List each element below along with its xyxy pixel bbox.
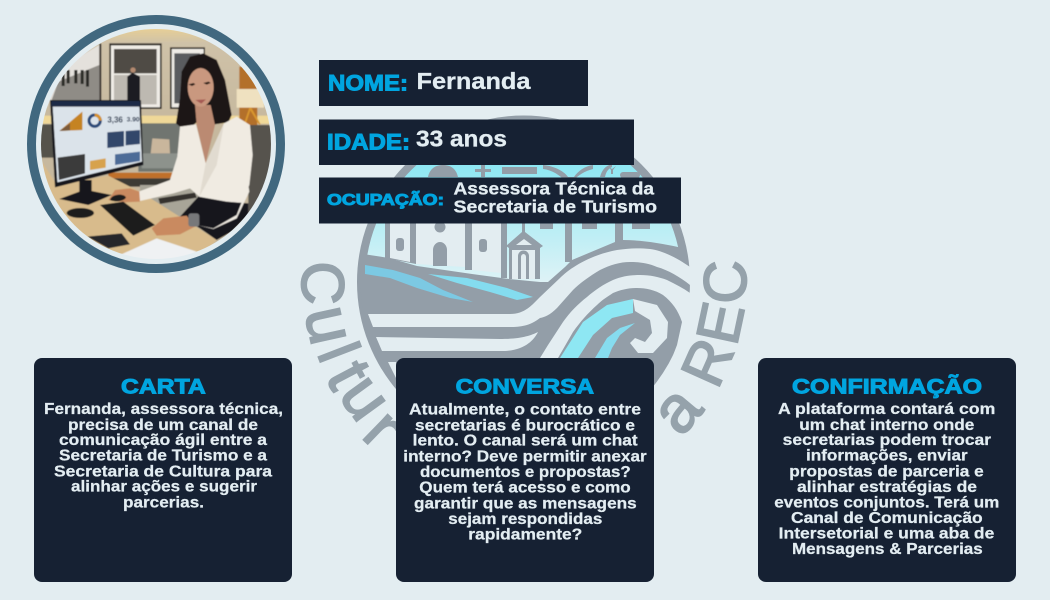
heading: confirmacao: CONFIRMAÇÃO xyxy=(792,373,982,398)
text block: carta: alinhar ações e sugerir xyxy=(71,479,257,496)
wave curl xyxy=(630,299,668,353)
woman face xyxy=(188,68,214,107)
logo circular lettering: u xyxy=(291,299,371,351)
blue water xyxy=(560,299,633,358)
text block: confirmacao: informações, enviar xyxy=(806,448,968,465)
sofa xyxy=(40,124,53,158)
info bar: ocupacao: OCUPAÇÃO: xyxy=(327,191,444,209)
woman hair xyxy=(176,53,232,128)
panel: carta xyxy=(34,358,292,582)
woman neck and chest xyxy=(195,105,215,163)
text block: confirmacao xyxy=(774,401,999,558)
info bar: nome: Fernanda xyxy=(416,68,531,94)
logo circular lettering: R xyxy=(668,329,747,396)
heading: carta: CARTA xyxy=(121,374,206,398)
text block: confirmacao: Canal de Comunicação xyxy=(791,510,983,527)
office scene illustration: 3,36 xyxy=(107,115,123,124)
logo circular lettering: C xyxy=(289,261,356,305)
panel: conversa xyxy=(396,358,654,582)
text block: conversa: Quem terá acesso e como xyxy=(419,479,631,496)
text block: conversa: documentos e propostas? xyxy=(420,464,631,481)
text block: carta: comunicação ágil entre a xyxy=(59,432,267,449)
heading: conversa: CONVERSA xyxy=(456,374,594,398)
text block: confirmacao: um chat interno onde xyxy=(799,417,974,434)
info bar: ocupacao: Secretaria de Turismo xyxy=(454,197,657,217)
hand on mouse xyxy=(108,188,140,202)
logo circular lettering: l xyxy=(305,334,372,370)
white wave band two xyxy=(540,275,702,362)
text block: confirmacao: propostas de parceria e xyxy=(789,464,984,481)
info bar: idade: IDADE: xyxy=(327,129,410,154)
logo circular lettering: u xyxy=(326,360,408,433)
text block: conversa xyxy=(403,401,647,543)
mice and calculator xyxy=(110,195,126,201)
left stripes xyxy=(376,332,538,378)
text block: carta xyxy=(44,401,283,512)
office scene illustration xyxy=(40,25,275,262)
info bar: nome: NOME: xyxy=(328,71,408,96)
info bar: idade: 33 anos xyxy=(416,126,507,152)
wall stripes xyxy=(239,67,257,125)
text block: carta: parcerias. xyxy=(123,495,204,512)
text block: confirmacao: alinhar estratégias de xyxy=(797,479,977,496)
text block: conversa: lento. O canal será um chat xyxy=(413,433,638,450)
woman pants xyxy=(180,197,248,240)
text block: conversa: rapidamente? xyxy=(468,526,582,543)
office scene illustration: 3.90 xyxy=(127,117,140,124)
text block: confirmacao: eventos conjuntos. Terá um xyxy=(774,495,999,512)
info bar: nome xyxy=(319,60,588,106)
keyboard xyxy=(100,202,155,236)
text block: carta: precisa de um canal de xyxy=(68,417,258,434)
text block: conversa: garantir que as mensagens xyxy=(414,495,637,512)
text block: conversa: secretarias é burocrático e xyxy=(415,417,635,434)
info bar: ocupacao: Assessora Técnica da xyxy=(454,179,654,199)
logo circular lettering: t xyxy=(313,349,387,400)
book on desk xyxy=(158,193,197,204)
left picture xyxy=(47,45,99,108)
logo circular lettering: C xyxy=(692,260,759,304)
text block: conversa: sejam respondidas xyxy=(448,511,602,528)
portrait ring xyxy=(32,20,280,268)
text block: confirmacao: Mensagens & Parcerias xyxy=(792,541,983,558)
river streaks xyxy=(365,265,473,302)
logo circle emblem xyxy=(357,116,690,389)
logo circular lettering: r xyxy=(351,393,418,462)
lamp xyxy=(237,89,264,108)
text block: conversa: Atualmente, o contato entre xyxy=(409,401,641,418)
right picture xyxy=(170,47,205,109)
woman blouse xyxy=(138,116,254,204)
desk xyxy=(42,163,216,254)
text block: carta: Secretaria de Turismo e a xyxy=(59,448,267,465)
logo circular lettering xyxy=(289,260,759,462)
info bar: idade xyxy=(319,120,634,165)
buildings xyxy=(385,222,416,264)
gray hill and sea mass xyxy=(365,240,682,372)
text block: confirmacao: secretarias podem trocar xyxy=(783,432,991,449)
panel: confirmacao xyxy=(758,358,1016,582)
text block: carta: Secretaria de Cultura para xyxy=(54,464,272,481)
background logo watermark xyxy=(289,120,759,462)
white wave band one xyxy=(368,248,690,327)
middle picture xyxy=(109,43,162,109)
text block: carta: Fernanda, assessora técnica, xyxy=(44,401,283,418)
portrait photo of Fernanda xyxy=(32,20,280,268)
text block: conversa: interno? Deve permitir anexar xyxy=(403,449,647,466)
hand on keyboard xyxy=(152,216,195,236)
text block: confirmacao: Intersetorial e uma aba de xyxy=(779,526,994,543)
logo circular lettering: a xyxy=(635,371,716,447)
monitor xyxy=(59,180,112,205)
text block: confirmacao: A plataforma contará com xyxy=(778,401,995,418)
info bar: ocupacao xyxy=(319,178,681,224)
logo circular lettering: E xyxy=(684,297,757,350)
